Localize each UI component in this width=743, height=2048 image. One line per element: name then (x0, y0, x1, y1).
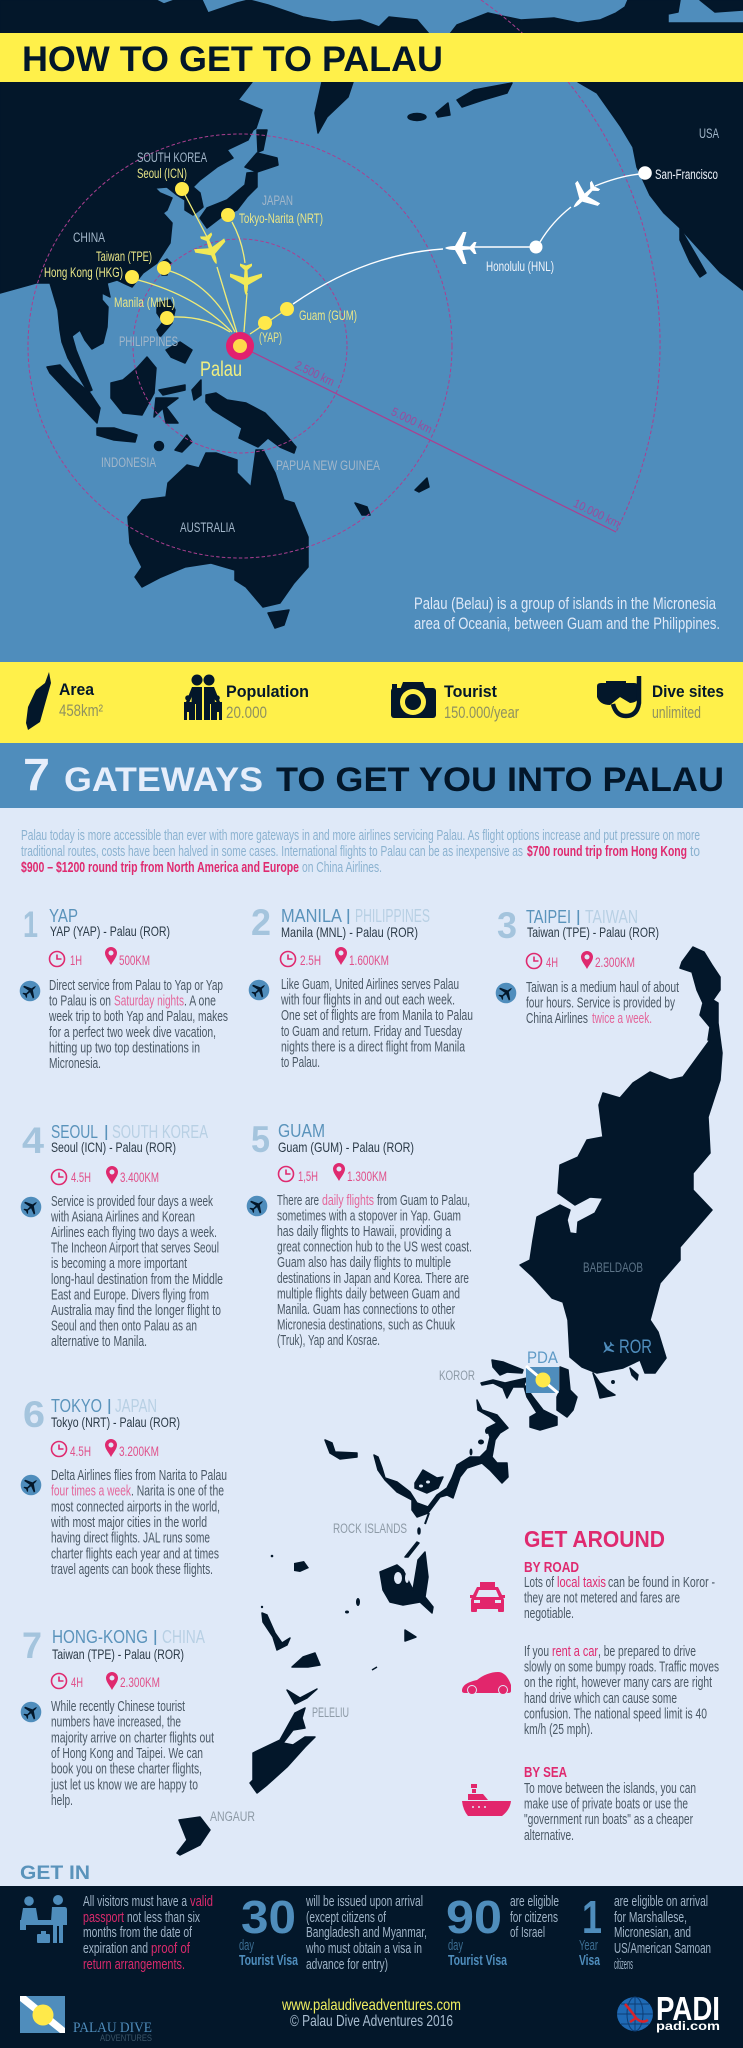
logo: Palau Dive Adventures (20, 1996, 152, 2043)
fact: area: 458km² (59, 701, 103, 720)
gateway 6: Tokyo: travel agents can book these flights. (51, 1562, 213, 1578)
map: white flight routes (293, 174, 640, 304)
gateway 4: Seoul: 3.400KM (120, 1169, 159, 1185)
visa: 90 day (446, 1891, 559, 1969)
heading: 7 gateways: TO GET YOU INTO PALAU (276, 761, 724, 799)
gateway 2: Manila: to Guam and return. Friday and Tuesday (281, 1024, 463, 1040)
gateway 7: Hong Kong: While recently Chinese tourist (51, 1699, 185, 1715)
gateway 7: Hong Kong: HONG-KONG (52, 1627, 148, 1647)
visa: 30 day (239, 1891, 427, 1973)
gateway 2: Manila: 2 (251, 902, 271, 943)
gateway 6: Tokyo: 3.200KM (119, 1443, 159, 1459)
gateway 1: Yap: 1H (70, 952, 82, 968)
visa: 30 day: (except citizens of (306, 1909, 387, 1926)
icon: Palau silhouette (26, 672, 51, 730)
gateway 5: Guam: Manila. Guam has connections to other (277, 1302, 455, 1318)
map: yellow flight routes (138, 189, 287, 334)
text: rent a car: rent a car (552, 1644, 598, 1660)
gateway 3: Taipei: TAIPEI (526, 907, 571, 927)
gateway 5: Guam: Guam also has daily flights to multiple (277, 1255, 451, 1271)
text: rent a car: , be prepared to drive (598, 1644, 696, 1660)
text: rent a car (524, 1644, 719, 1738)
gateway 4: Seoul: 4 (22, 1120, 44, 1161)
logo: PADI (617, 1990, 720, 2033)
map: airport markers (125, 166, 652, 360)
title band (0, 33, 743, 82)
gateway 3: Taipei: 2.300KM (595, 954, 635, 970)
gateway 6: Tokyo: 6 (23, 1394, 45, 1435)
logo: Palau Dive Adventures: PALAU DIVE (73, 2020, 152, 2036)
gateway 6: Tokyo: . Narita is one of the (131, 1484, 224, 1500)
gateway 7: Hong Kong (20, 1625, 214, 1809)
gateway 2: Manila: to Palau. (281, 1055, 320, 1071)
text: passport rules (83, 1893, 213, 1973)
heading: 7 gateways: 7 (23, 749, 50, 800)
gateway 4: Seoul: Australia may find the longer flight to (51, 1303, 221, 1319)
gateway 7: Hong Kong: majority arrive on charter flights out (51, 1730, 214, 1746)
visa: 30 day: Tourist Visa (239, 1952, 298, 1969)
visa: 1 year: for Marshallese, (614, 1909, 687, 1926)
gateway 2: Manila: PHILIPPINES (355, 906, 430, 926)
map: Palau labels: ROR (619, 1337, 652, 1358)
gateway 1: Yap: to Palau is on (49, 994, 111, 1010)
gateway 6: Tokyo: 4.5H (70, 1443, 91, 1459)
gateway 7: Hong Kong: help. (51, 1793, 73, 1809)
gateway 5: Guam: sometimes with a stopover in Yap. Guam (277, 1209, 461, 1225)
text: boats (524, 1781, 696, 1844)
panel: route map (0, 0, 743, 662)
gateway 1: Yap: YAP (49, 906, 78, 926)
heading: 7 gateways: GATEWAYS (64, 761, 263, 799)
icon: PDA logo on map (526, 1366, 559, 1393)
icon: white plane from Honolulu (445, 232, 476, 264)
gateway 3: Taipei: Taiwan is a medium haul of about (526, 980, 679, 996)
text: passport rules: All visitors must have a (83, 1893, 187, 1910)
panel: facts strip (0, 662, 743, 743)
gateway 5: Guam: 5 (251, 1119, 270, 1160)
map: Palau labels: KOROR (439, 1368, 475, 1383)
visa: 30 day: who must obtain a visa in (305, 1940, 422, 1957)
subheading: by sea: BY SEA (524, 1765, 567, 1781)
gateway 5: Guam: has daily flights to Hawaii, providing a (277, 1224, 452, 1240)
icon: car (462, 1672, 511, 1694)
gateway 4: Seoul: Seoul and then onto Palau as an (51, 1318, 197, 1334)
gateway 7: Hong Kong: 4H (71, 1674, 83, 1690)
text: passport rules: valid (190, 1893, 213, 1910)
gateway 5: Guam: from Guam to Palau, (377, 1193, 470, 1209)
gateway 4: Seoul: SOUTH KOREA (112, 1122, 208, 1142)
panel: get in and footer (0, 1886, 743, 2048)
icon: yellow plane from Tokyo (230, 264, 262, 295)
map: distance rings: 10.000 km (571, 496, 622, 531)
text: taxis: local taxis (557, 1575, 606, 1591)
text: taxis: Lots of (524, 1575, 555, 1591)
fact: dive sites: unlimited (652, 703, 701, 722)
gateway 7: Hong Kong: 7 (22, 1625, 42, 1666)
visa: 30 day: advance for entry) (306, 1956, 388, 1973)
map: place labels: SOUTH KOREA (137, 150, 207, 165)
gateway 6: Tokyo: having direct flights. JAL runs some (51, 1531, 210, 1547)
text: about Palau (414, 594, 720, 633)
map: place labels: Honolulu (HNL) (486, 259, 554, 274)
gateway 2: Manila: Like Guam, United Airlines serves Palau (281, 977, 459, 993)
gateway 5: Guam: (Truk), Yap and Kosrae. (277, 1333, 380, 1349)
fact: tourist: Tourist (444, 682, 497, 701)
gateway 6: Tokyo: four times a week (51, 1484, 132, 1500)
gateway 2: Manila: 1.600KM (349, 952, 389, 968)
map: place labels: PHILIPPINES (119, 334, 178, 349)
logo: PADI: padi.com (656, 2019, 720, 2033)
gateway 3: Taipei: TAIWAN (585, 907, 638, 927)
gateway 3: Taipei: 3 (497, 905, 517, 946)
map: distance rings: 2.500 km (293, 358, 337, 389)
gateway 5: Guam: There are (277, 1193, 319, 1209)
text: rent a car: km/h (25 mph). (524, 1722, 593, 1738)
text: passport rules: passport (83, 1909, 125, 1926)
map: place labels: Manila (MNL) (114, 295, 175, 310)
text: gateways intro: to (690, 844, 700, 860)
gateway 1: Yap: 1 (23, 904, 38, 945)
icon: dive mask and snorkel (597, 676, 639, 716)
map: place labels: INDONESIA (101, 455, 156, 470)
gateway 7: Hong Kong: 2.300KM (120, 1674, 160, 1690)
map: place labels: Hong Kong (HKG) (44, 265, 123, 280)
gateway 1: Yap: Saturday nights (114, 994, 184, 1010)
text: passport rules: return arrangements. (83, 1956, 185, 1973)
logo: PADI: PADI (656, 1990, 720, 2027)
gateway 4: Seoul: Airlines each flying two days a week. (51, 1225, 217, 1241)
fact: tourist: 150.000/year (444, 703, 519, 722)
icon: yellow plane from Seoul (191, 229, 232, 270)
gateway 2: Manila: 2.5H (300, 952, 321, 968)
visa: 30 day: 30 (241, 1891, 296, 1943)
fact: population: 20.000 (226, 703, 267, 722)
visa: 1 year: Visa (579, 1952, 600, 1969)
gateway 4: Seoul: alternative to Manila. (51, 1334, 147, 1350)
gateway 6: Tokyo: Delta Airlines flies from Narita to Palau (51, 1468, 227, 1484)
visa: 1 year: citizens (614, 1956, 633, 1973)
gateway 7: Hong Kong: of Hong Kong and Taipei. We can (51, 1746, 203, 1762)
visa: 1 year: Year (579, 1937, 598, 1954)
map: distance rings: 5.000 km (389, 404, 435, 436)
gateway 3: Taipei: China Airlines (526, 1011, 588, 1027)
map: distance rings (28, 0, 660, 558)
gateway 5: Guam: great connection hub to the US west coast. (277, 1240, 472, 1256)
fact: dive sites (652, 682, 724, 722)
gateway 1: Yap: YAP (YAP) - Palau (ROR) (50, 923, 170, 939)
map: place labels: JAPAN (262, 193, 293, 208)
gateway 4: Seoul: is becoming a more important (51, 1256, 187, 1272)
visa: 1 year (579, 1891, 711, 1973)
map: Palau labels: ROCK ISLANDS (333, 1521, 407, 1536)
visa: 90 day: day (448, 1937, 463, 1954)
gateway 4: Seoul: with Asiana Airlines and Korean (50, 1210, 195, 1226)
text: gateways intro: traditional routes, costs have been halved in some cases. International flights to Palau can be as inexpensive as (21, 844, 523, 860)
map: Palau labels (210, 1260, 652, 1824)
icon: camera (391, 682, 436, 718)
gateway 3: Taipei: twice a week. (592, 1011, 652, 1027)
map: place labels (44, 126, 719, 535)
text: passport rules: proof of (151, 1940, 191, 1957)
text: taxis: they are not metered and fares are (524, 1591, 680, 1607)
gateway 3: Taipei (495, 905, 679, 1027)
visa: 30 day: will be issued upon arrival (305, 1893, 423, 1910)
fact: area (59, 680, 103, 720)
gateway 4: Seoul: East and Europe. Divers flying from (51, 1287, 209, 1303)
gateway 4: Seoul: The Incheon Airport that serves Seoul (51, 1241, 219, 1257)
gateway 7: Hong Kong: numbers have increased, the (51, 1715, 181, 1731)
gateway 4: Seoul: Seoul (ICN) - Palau (ROR) (51, 1139, 176, 1155)
map: place labels: San-Francisco (655, 167, 718, 182)
text: passport rules: not less than six (127, 1909, 200, 1926)
gateway 2: Manila: Manila (MNL) - Palau (ROR) (281, 924, 418, 940)
icon: taxi (470, 1582, 505, 1612)
text: passport rules: expiration and (83, 1940, 148, 1957)
gateway 4: Seoul: long-haul destination from the Middle (51, 1272, 223, 1288)
text: passport rules: months from the date of (83, 1924, 193, 1941)
gateway 7: Hong Kong: just let us know we are happy to (50, 1777, 198, 1793)
footer: website and copyright (281, 1997, 461, 2030)
gateway 6: Tokyo: most connected airports in the world, (51, 1499, 220, 1515)
map: place labels: CHINA (73, 230, 105, 245)
fact: tourist (444, 682, 519, 722)
gateway 1: Yap: 500KM (119, 952, 150, 968)
gateway 5: Guam: multiple flights daily between Guam and (277, 1286, 460, 1302)
icon: passport control (20, 1895, 67, 1943)
visa: 30 day: Bangladesh and Myanmar, (306, 1924, 427, 1941)
text: gateways intro: $900 – $1200 round trip from North America and Europe (21, 860, 299, 876)
gateway 1: Yap: hitting up two top destinations in (49, 1040, 200, 1056)
footer: website and copyright: www.palaudiveadventures.com (281, 1997, 461, 2014)
map: Palau labels: PDA (527, 1348, 559, 1367)
map: Palau labels: BABELDAOB (583, 1260, 643, 1275)
panel: gateways and Palau map (0, 808, 743, 1886)
map: Palau labels: PELELIU (312, 1705, 349, 1720)
heading: get around: GET AROUND (524, 1526, 665, 1552)
text: gateways intro: on China Airlines. (302, 860, 382, 876)
visa: 30 day: day (239, 1937, 254, 1954)
gateway 1: Yap: for a perfect two week dive vacation, (49, 1025, 216, 1041)
gateway 1: Yap (19, 904, 228, 1072)
icon: boat (462, 1784, 511, 1816)
visa: 90 day: are eligible (510, 1893, 559, 1910)
gateway 6: Tokyo: JAPAN (115, 1396, 157, 1416)
map: place labels: USA (699, 126, 719, 141)
visa: 90 day: 90 (446, 1891, 502, 1943)
gateway 5: Guam: destinations in Japan and Korea. There are (277, 1271, 469, 1287)
title band: HOW TO GET TO PALAU (22, 40, 443, 79)
gateway 2: Manila (248, 902, 473, 1071)
icon: family (184, 674, 222, 720)
text: taxis (524, 1575, 715, 1622)
map: place labels: Palau (200, 358, 242, 381)
gateway 5: Guam: 1,5H (298, 1168, 318, 1184)
gateway 5: Guam: daily flights (322, 1193, 374, 1209)
gateway 2: Manila: One set of flights are from Manila to Palau (281, 1008, 473, 1024)
heading: 7 gateways (0, 743, 743, 808)
gateway 6: Tokyo: with most major cities in the world (50, 1515, 207, 1531)
footer: website and copyright: © Palau Dive Adventures 2016 (290, 2013, 453, 2030)
text: rent a car: hand drive which can cause some (524, 1691, 677, 1707)
gateway 2: Manila: nights there is a direct flight from Manila (281, 1039, 466, 1055)
gateway 7: Hong Kong: CHINA (162, 1627, 205, 1647)
visa: 90 day: Tourist Visa (448, 1952, 507, 1969)
map: place labels: Tokyo-Narita (NRT) (239, 211, 323, 226)
gateway 3: Taipei: Taiwan (TPE) - Palau (ROR) (527, 924, 659, 940)
gateway 7: Hong Kong: book you on these charter flights, (51, 1762, 202, 1778)
gateway 5: Guam: Guam (GUM) - Palau (ROR) (278, 1139, 414, 1155)
map: land masses (0, 0, 743, 628)
gateway 4: Seoul (20, 1120, 223, 1350)
gateway 6: Tokyo: Tokyo (NRT) - Palau (ROR) (51, 1414, 180, 1430)
gateway 4: Seoul: Service is provided four days a week (51, 1194, 214, 1210)
gateway 4: Seoul: 4.5H (71, 1169, 91, 1185)
visa: 90 day: of Israel (510, 1924, 545, 1941)
subheading: by road: BY ROAD (524, 1560, 579, 1576)
text: rent a car: If you (524, 1644, 549, 1660)
gateway 1: Yap: week trip to both Yap and Palau, makes (48, 1009, 228, 1025)
gateway 1: Yap: Micronesia. (49, 1056, 101, 1072)
map: place labels: AUSTRALIA (180, 520, 235, 535)
gateway 5: Guam: 1.300KM (347, 1168, 387, 1184)
gateway 6: Tokyo: charter flights each year and at times (51, 1546, 219, 1562)
fact: area: Area (59, 680, 94, 699)
map: place labels: (YAP) (259, 330, 282, 345)
gateway 3: Taipei: 4H (546, 954, 558, 970)
logo: Palau Dive Adventures: ADVENTURES (100, 2033, 152, 2043)
gateway 2: Manila: with four flights in and out each week. (280, 993, 455, 1009)
gateway 1: Yap: Direct service from Palau to Yap or Yap (49, 978, 223, 994)
gateway 5: Guam (246, 1119, 472, 1349)
gateway 2: Manila: MANILA (281, 906, 342, 926)
panel: get around (462, 1526, 719, 1844)
text: boats: alternative. (524, 1828, 574, 1844)
gateway 5: Guam: GUAM (278, 1121, 325, 1141)
fact: population: Population (226, 682, 309, 701)
map: place labels: Taiwan (TPE) (96, 249, 152, 264)
text: gateways intro (21, 828, 700, 876)
gateway 4: Seoul: SEOUL (51, 1122, 98, 1142)
gateway 5: Guam: Micronesia destinations, such as Chuuk (277, 1317, 456, 1333)
map: place labels: PAPUA NEW GUINEA (276, 458, 380, 473)
visa: 1 year: 1 (582, 1891, 602, 1943)
gateway 6: Tokyo (20, 1394, 227, 1578)
fact: population (226, 682, 309, 722)
gateway 7: Hong Kong: Taiwan (TPE) - Palau (ROR) (52, 1646, 184, 1662)
gateway 6: Tokyo: TOKYO (51, 1396, 102, 1416)
gateway 3: Taipei: four hours. Service is provided by (526, 996, 676, 1012)
fact: dive sites: Dive sites (652, 682, 724, 701)
map: Palau islands (177, 947, 722, 1855)
visa: 1 year: Micronesian, and (614, 1924, 691, 1941)
icon: white plane from San Francisco (562, 174, 607, 219)
visa: 90 day: for citizens (510, 1909, 558, 1926)
heading: get in: GET IN (20, 1863, 90, 1884)
text: taxis: negotiable. (524, 1606, 574, 1622)
map: place labels: Seoul (ICN) (137, 166, 187, 181)
map: place labels: Guam (GUM) (299, 308, 357, 323)
map: Palau labels: ANGAUR (210, 1809, 255, 1824)
gateway 1: Yap: . A one (184, 994, 216, 1010)
